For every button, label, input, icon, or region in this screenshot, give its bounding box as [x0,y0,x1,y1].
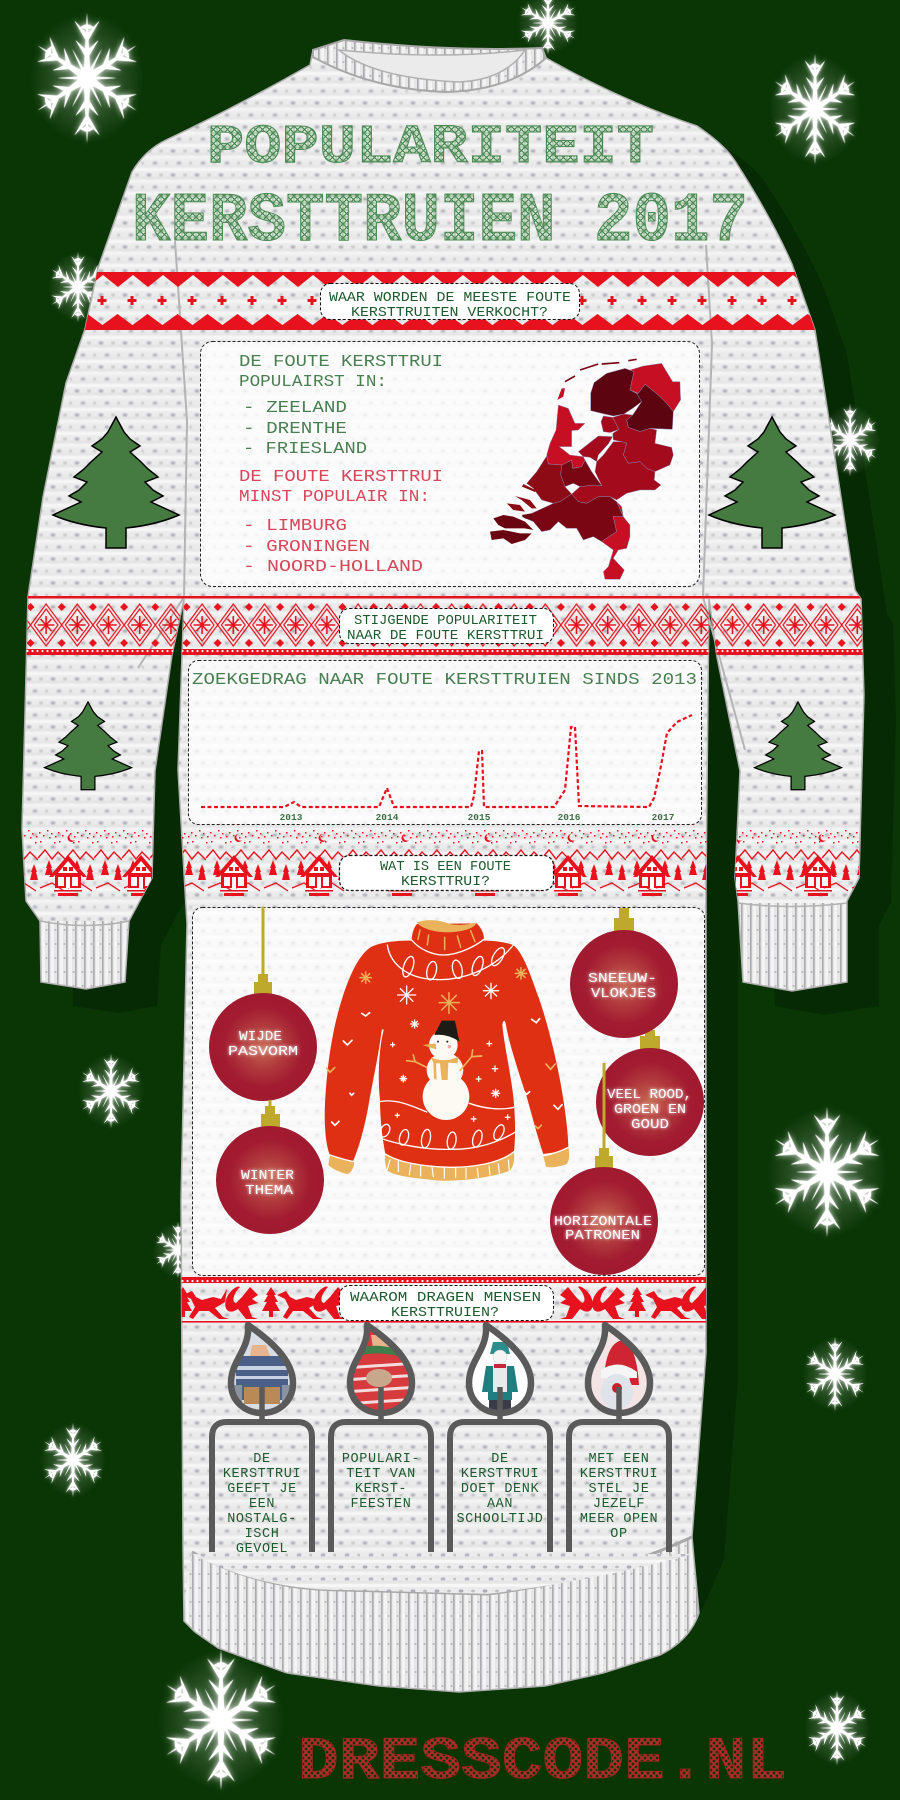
candle: meer open op: KERSTTRUI [580,1467,658,1482]
ornament: winter thema: THEMA [245,1183,294,1199]
pill: waar worden [320,284,580,321]
text: populairst: - FRIESLAND [243,440,367,459]
map: Netherlands [490,359,681,579]
trend line [201,715,692,807]
band: triangles [84,272,815,330]
text: minst populair [239,468,443,577]
text: populairst: DE FOUTE KERSTTRUI [239,353,443,372]
candle: nostalgisch gevoel: KERSTTRUI [223,1467,301,1482]
pill: wat is een foute kersttrui [340,856,554,890]
ornament: sneeuwvlokjes: VLOKJES [591,986,656,1002]
band: foxes and trees [174,1277,714,1323]
pill: waar worden: KERSTTRUITEN VERKOCHT? [351,306,548,321]
icon: large tree left [53,417,179,548]
year axis labels [280,812,675,823]
right cuff [738,903,847,995]
ornament: wijde pasvorm [209,907,317,1101]
ornament: wijde pasvorm: PASVORM [228,1044,298,1060]
candle: meer open op: STEL JE [589,1482,649,1497]
year axis labels: 2017 [652,812,675,823]
pill: waarom dragen mensen kersttruien: WAAROM DRAGEN MENSEN [350,1291,541,1306]
icon: small tree right [755,702,841,790]
title: KERSTTRUIEN 2017 [132,183,748,262]
snowflake: top centre [517,0,579,54]
candle: nostalgisch gevoel [212,1325,312,1557]
band: diamonds and snow crosses [20,596,880,655]
candle: meer open op: MET EEN [589,1452,649,1467]
pill: stijgende populariteit [340,608,554,644]
chart title: ZOEKGEDRAG NAAR FOUTE KERSTTRUIEN SINDS 2013 [192,671,697,690]
text: minst populair: DE FOUTE KERSTTRUI [239,468,443,487]
candle: nostalgisch gevoel: DE [253,1452,271,1467]
year axis labels: 2016 [558,812,581,823]
text: minst populair: - GRONINGEN [243,538,370,557]
band: village [20,830,880,896]
candle: populariteit van kerstfeesten [331,1325,431,1552]
candle: populariteit van kerstfeesten: FEESTEN [351,1497,411,1512]
snowflake: top left [30,13,144,143]
year axis labels: 2014 [376,812,399,823]
candle: meer open op: JEZELF [593,1497,645,1512]
footer brand: DRESSCODE.NL [298,1729,787,1797]
candle: doet denken aan schooltijd: KERSTTRUI [461,1467,539,1482]
ornament: sneeuwvlokjes [570,908,678,1038]
candle: populariteit van kerstfeesten: POPULARI- [342,1452,420,1467]
pill: wat is een foute kersttrui: WAT IS EEN FOUTE [380,860,511,875]
ornament: winter thema [216,1100,324,1234]
ornament: wijde pasvorm: WIJDE [239,1029,282,1045]
ornament: horizontale patronen: PATRONEN [565,1228,640,1244]
pill: stijgende populariteit: NAAR DE FOUTE KERSTTRUI [347,629,544,644]
pill: waarom dragen mensen kersttruien [340,1286,554,1321]
icon: large tree right [709,417,835,548]
candle: nostalgisch gevoel: GEVOEL [236,1542,288,1557]
snowflake: right lower [802,1337,868,1411]
pill: stijgende populariteit: STIJGENDE POPULARITEIT [354,614,537,629]
candle: populariteit van kerstfeesten: KERST- [355,1482,407,1497]
candle: doet denken aan schooltijd: DOET DENK [461,1482,539,1497]
candle: meer open op: OP [610,1527,628,1542]
pill: waarom dragen mensen kersttruien: KERSTTRUIEN? [391,1306,499,1321]
collar [313,40,546,92]
panel: provinces map [200,342,700,586]
year axis labels: 2013 [280,812,303,823]
year axis labels: 2015 [468,812,491,823]
text: minst populair: - LIMBURG [243,517,347,536]
snowman [407,1021,482,1120]
text: populairst: - ZEELAND [243,399,347,418]
hem rib [184,1540,698,1691]
text: populairst: POPULAIRST IN: [239,373,387,392]
candle: meer open op [569,1325,669,1552]
candle: meer open op: MEER OPEN [580,1512,658,1527]
ornament: sneeuwvlokjes: SNEEUW- [588,971,657,987]
title [132,116,748,262]
hem upper cover [188,1554,692,1594]
candle: nostalgisch gevoel: ISCH [245,1527,279,1542]
left cuff [40,921,128,988]
ornament: winter thema: WINTER [241,1168,295,1184]
icon: small tree left [45,702,131,790]
pill: waar worden: WAAR WORDEN DE MEESTE FOUTE [329,291,571,306]
snowflake: behind left shoulder [48,252,108,322]
candle: nostalgisch gevoel: NOSTALG- [227,1512,297,1527]
ornament: veel rood, groen en goud [596,1030,704,1156]
illustration: red christmas sweater [325,920,569,1181]
ornament: veel rood, groen en goud: GOUD [631,1117,669,1133]
snowflake: bottom left large [158,1650,284,1790]
candle: doet denken aan schooltijd: SCHOOLTIJD [456,1512,544,1527]
sweater shadow [73,150,896,1615]
snowflake: left middle [78,1054,144,1128]
snowflake: left lower [40,1423,106,1497]
panel: wat is een foute kersttrui [192,907,704,1276]
candle: nostalgisch gevoel: GEEFT JE [227,1482,297,1497]
ornament: horizontale patronen: HORIZONTALE [554,1214,652,1230]
candle: doet denken aan schooltijd: DE [491,1452,509,1467]
text: minst populair: MINST POPULAIR IN: [239,488,430,507]
snowflake: top right [769,54,861,164]
ornament: horizontale patronen [550,1063,658,1275]
candle: doet denken aan schooltijd: AAN [487,1497,513,1512]
candle: populariteit van kerstfeesten: TEIT VAN [346,1467,416,1482]
snowflake: right of sleeve [820,404,880,476]
text: populairst [239,353,443,459]
ornament: veel rood, groen en goud: GROEN EN [614,1102,686,1118]
candle: nostalgisch gevoel: EEN [249,1497,275,1512]
snowflake: right middle large [767,1107,887,1237]
title: POPULARITEIT [207,116,654,179]
text: minst populair: - NOORD-HOLLAND [243,558,423,577]
snowflake: bottom right [804,1691,870,1765]
candle: doet denken aan schooltijd [450,1325,550,1552]
ornament: veel rood, groen en goud: VEEL ROOD, [607,1087,692,1103]
pill: wat is een foute kersttrui: KERSTTRUI? [401,875,490,890]
text: populairst: - DRENTHE [243,420,347,439]
snowflake: behind body left [153,1222,203,1278]
panel: search trend line chart [188,660,702,824]
